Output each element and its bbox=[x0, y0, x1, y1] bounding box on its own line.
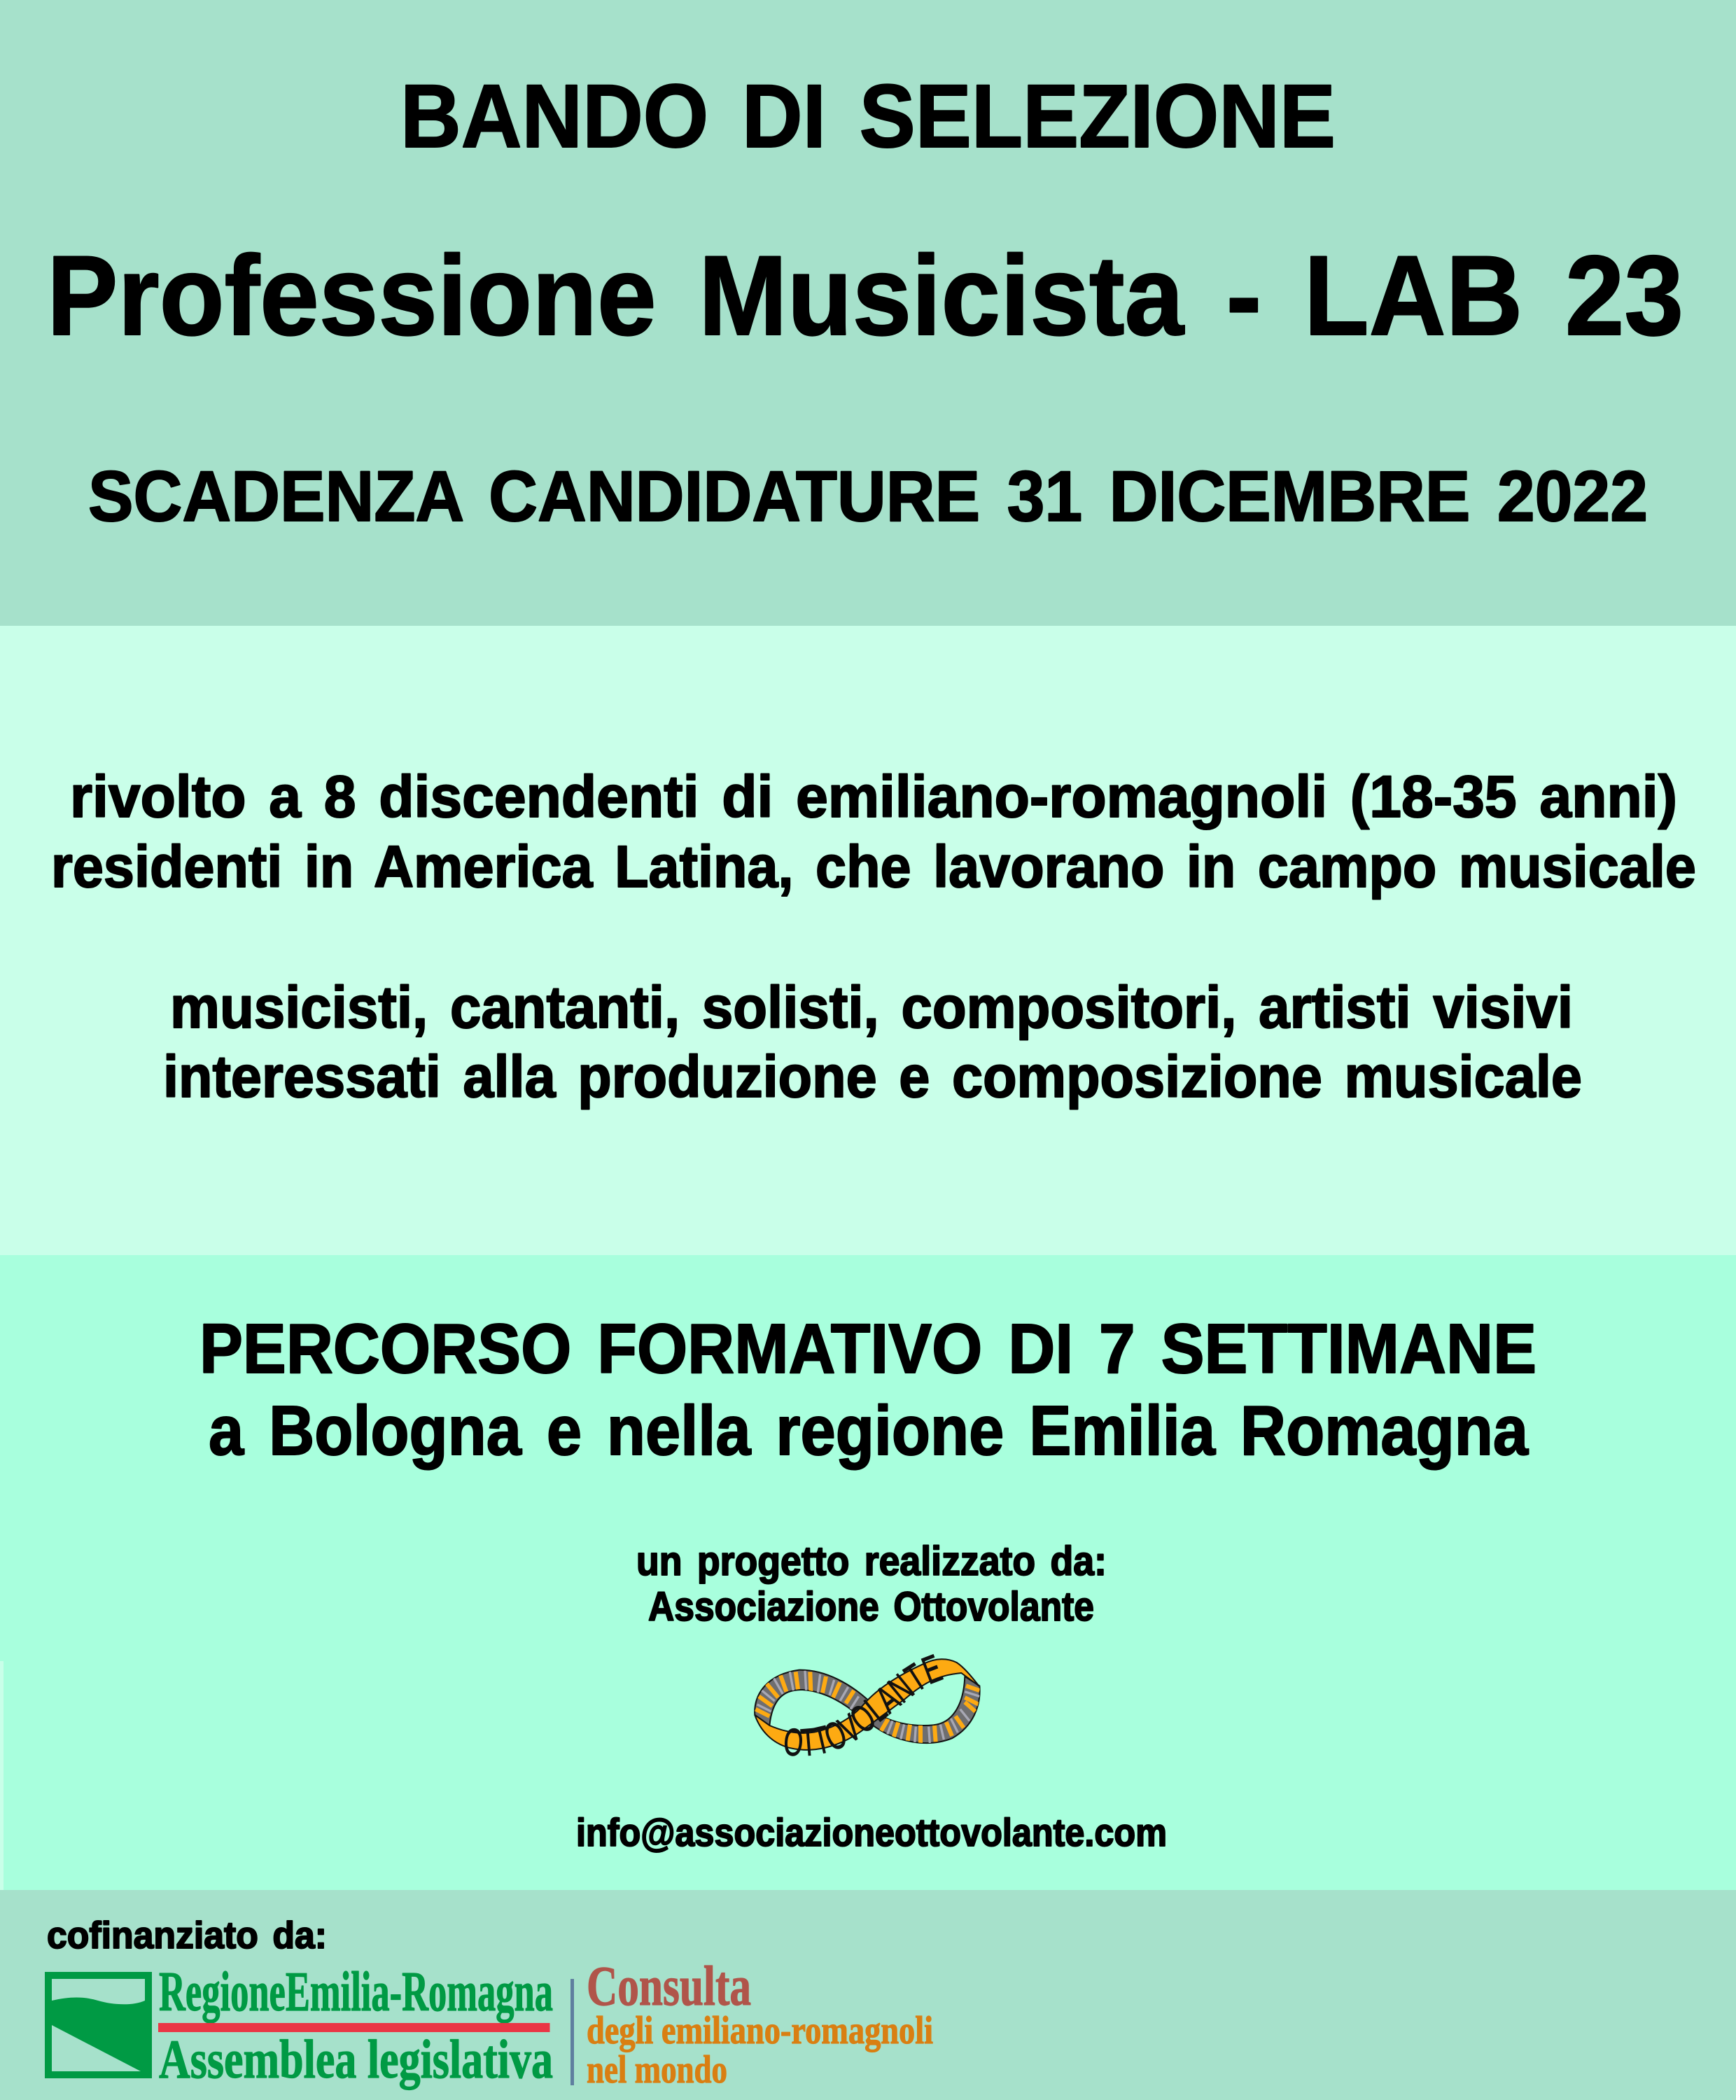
logo text: consulta bbox=[587, 1956, 933, 2092]
heading: programme: a Bologna e nella regione Emilia Romagna bbox=[209, 1392, 1529, 1470]
text block: recipients: rivolto a 8 discendenti di emiliano-romagnoli (18-35 anni) bbox=[70, 764, 1677, 830]
heading: programme bbox=[200, 1310, 1536, 1470]
text block: professions: musicisti, cantanti, solisti, compositori, artisti visivi bbox=[170, 974, 1573, 1040]
panel: training programme bbox=[0, 1255, 1736, 1890]
panel: header bbox=[0, 0, 1736, 626]
logo text: consulta: Consulta bbox=[587, 1956, 751, 2017]
text block: professions bbox=[163, 974, 1582, 1110]
text block: project credit: un progetto realizzato da: bbox=[636, 1539, 1107, 1584]
logo text: regione emilia-romagna assemblea legislativa: RegioneEmilia-Romagna bbox=[159, 1961, 553, 2023]
text block: professions: interessati alla produzione e composizione musicale bbox=[163, 1044, 1582, 1110]
text block: project credit bbox=[636, 1539, 1107, 1630]
logo text: regione emilia-romagna assemblea legislativa bbox=[158, 1961, 553, 2090]
icon: ottovolante infinity logo bbox=[754, 1653, 981, 1756]
panel: target audience bbox=[0, 626, 1736, 1255]
text block: project credit: Associazione Ottovolante bbox=[648, 1584, 1094, 1630]
logo text: regione emilia-romagna assemblea legislativa: Assemblea legislativa bbox=[159, 2029, 553, 2090]
panel: funders bbox=[0, 1890, 1736, 2100]
icon: ottovolante infinity logo: OTTOVOLANTE bbox=[784, 1653, 944, 1756]
logo text: consulta: degli emiliano-romagnoli bbox=[587, 2009, 933, 2052]
text block: recipients bbox=[51, 764, 1696, 899]
label: cofinanziato: cofinanziato da: bbox=[47, 1914, 327, 1956]
icon: regione emilia-romagna emblem bbox=[45, 1972, 152, 2078]
heading: bando di selezione: BANDO DI SELEZIONE bbox=[400, 66, 1336, 167]
deadline: SCADENZA CANDIDATURE 31 DICEMBRE 2022 bbox=[88, 456, 1648, 536]
heading: programme: PERCORSO FORMATIVO DI 7 SETTIMANE bbox=[200, 1310, 1536, 1388]
contact email: info@associazioneottovolante.com bbox=[576, 1810, 1167, 1854]
logo text: consulta: nel mondo bbox=[587, 2048, 727, 2092]
